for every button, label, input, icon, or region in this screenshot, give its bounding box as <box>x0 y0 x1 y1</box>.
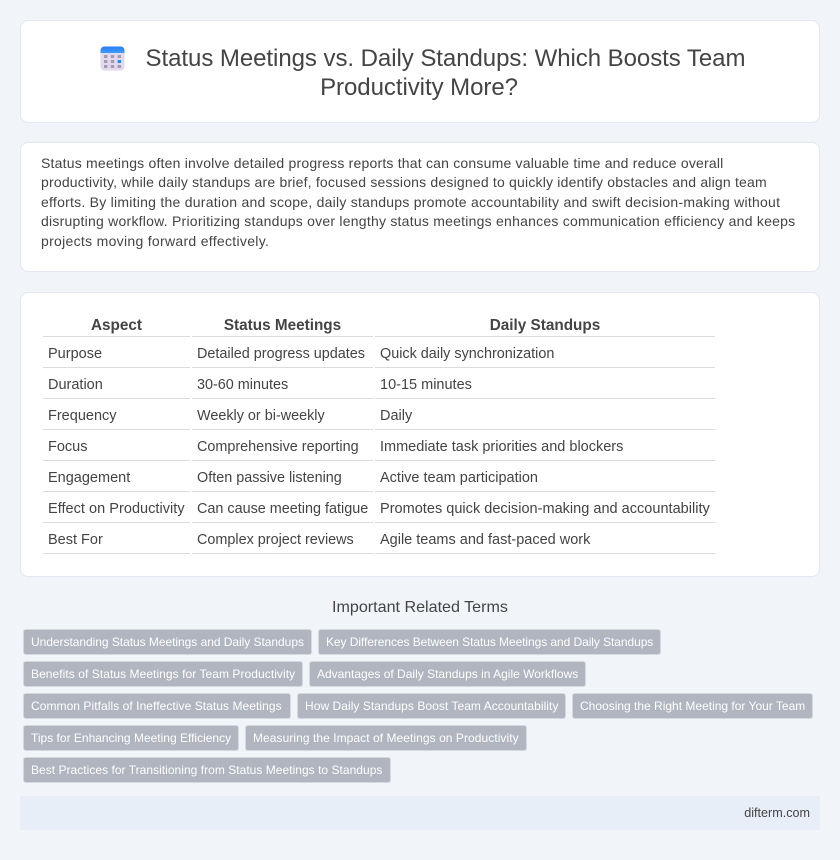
comparison table: Detailed progress updates <box>197 346 365 362</box>
intro text: Status meetings often involve detailed progress reports that can consume valuable time and reduce overall <box>41 154 724 170</box>
title: Productivity More? <box>320 74 518 101</box>
comparison table: Active team participation <box>380 470 538 486</box>
comparison table: Daily <box>380 408 412 424</box>
header panel <box>20 20 820 123</box>
related terms tags: Tips for Enhancing Meeting Efficiency <box>31 731 231 745</box>
footer bar <box>20 796 820 830</box>
comparison table: Purpose <box>48 346 102 362</box>
comparison table: Comprehensive reporting <box>197 438 359 454</box>
comparison table: Agile teams and fast-paced work <box>380 532 590 548</box>
comparison table: Can cause meeting fatigue <box>197 500 368 516</box>
related terms tags: Benefits of Status Meetings for Team Productivity <box>31 667 295 681</box>
icon: calendar <box>100 46 124 70</box>
comparison table: Promotes quick decision-making and accountability <box>380 500 710 516</box>
title: Status Meetings vs. Daily Standups: Which Boosts Team <box>146 45 745 72</box>
comparison table <box>43 317 715 554</box>
related terms tags <box>23 629 813 783</box>
comparison table: Frequency <box>48 408 117 424</box>
title <box>146 45 745 101</box>
comparison table: Often passive listening <box>197 470 342 486</box>
related terms tags: Best Practices for Transitioning from Status Meetings to Standups <box>31 763 382 777</box>
comparison table: Status Meetings <box>224 317 341 334</box>
comparison table: Daily Standups <box>490 317 600 334</box>
comparison table: Duration <box>48 376 103 392</box>
related terms tags: Advantages of Daily Standups in Agile Workflows <box>317 667 578 681</box>
comparison table: Aspect <box>91 317 142 334</box>
comparison table: 30-60 minutes <box>197 376 288 392</box>
related terms heading: Important Related Terms <box>332 598 508 616</box>
related terms tags: Understanding Status Meetings and Daily Standups <box>31 635 304 649</box>
footer brand: difterm.com <box>744 806 810 820</box>
comparison table: Immediate task priorities and blockers <box>380 438 623 454</box>
related terms tags: Measuring the Impact of Meetings on Productivity <box>253 731 519 745</box>
table panel <box>20 292 820 577</box>
comparison table: Weekly or bi-weekly <box>197 408 325 424</box>
related terms tags: Common Pitfalls of Ineffective Status Meetings <box>31 699 282 713</box>
comparison table: Engagement <box>48 470 130 486</box>
comparison table: 10-15 minutes <box>380 376 472 392</box>
comparison table: Effect on Productivity <box>48 500 185 516</box>
related terms tags: Key Differences Between Status Meetings and Daily Standups <box>326 635 653 649</box>
comparison table: Best For <box>48 532 103 548</box>
comparison table: Complex project reviews <box>197 532 354 548</box>
related terms tags: How Daily Standups Boost Team Accountability <box>305 699 558 713</box>
intro text <box>41 154 795 249</box>
intro text: productivity, while daily standups are brief, focused sessions designed to quickly identify obstacles and align team <box>41 174 767 190</box>
comparison table: Focus <box>48 438 88 454</box>
intro text: projects moving forward effectively. <box>41 233 269 249</box>
intro text: disrupting workflow. Prioritizing standups over lengthy status meetings enhances communication efficiency and keeps <box>41 213 795 229</box>
related terms tags: Choosing the Right Meeting for Your Team <box>580 699 805 713</box>
comparison table: Quick daily synchronization <box>380 346 554 362</box>
intro text: efforts. By limiting the duration and scope, daily standups promote accountability and swift decision-making without <box>41 194 780 210</box>
intro panel <box>20 142 820 272</box>
